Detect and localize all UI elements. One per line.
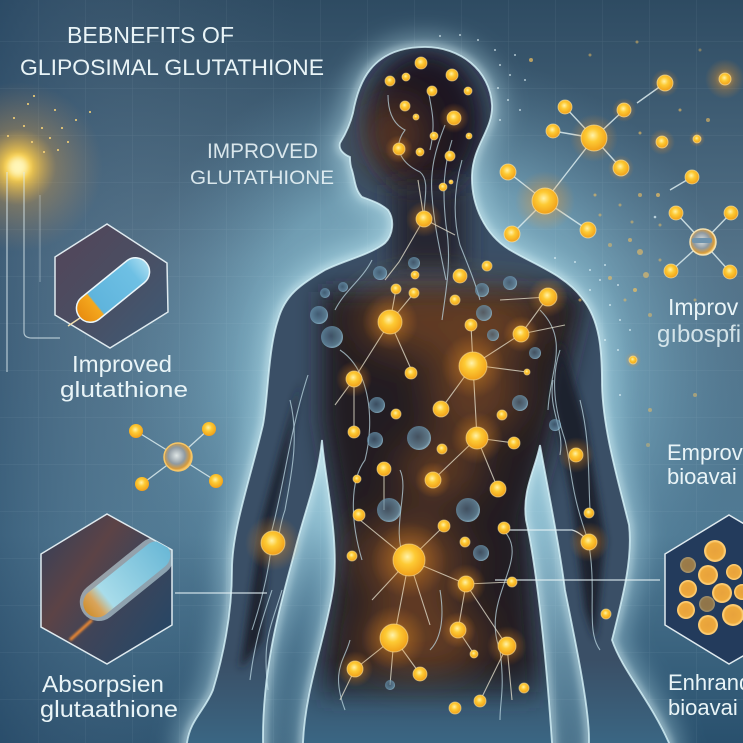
dark interior: torso xyxy=(320,292,585,700)
connector lines: callouts xyxy=(175,530,660,593)
dark interior: left arm xyxy=(240,380,300,670)
body halo xyxy=(187,47,669,743)
floating molecule network: upper xyxy=(500,59,743,368)
blue cells xyxy=(310,257,561,690)
dark interior: head xyxy=(367,50,483,194)
label: improved glutathione top: GLUTATHIONE xyxy=(190,168,334,189)
particle field: white dust xyxy=(439,34,656,396)
label: improved glutathione left xyxy=(60,351,188,402)
body nodes xyxy=(261,57,611,714)
label: improved bioavailability xyxy=(667,440,743,489)
label: improved right xyxy=(657,294,741,348)
title: BEBNEFITS OF xyxy=(67,22,234,48)
capsule xyxy=(71,252,155,328)
label: improved glutathione left: glutathione xyxy=(60,377,188,402)
label: absorption glutathione: Absorpsien xyxy=(42,671,164,697)
particle field: right xyxy=(529,40,710,447)
label: enhanced bioavailability xyxy=(668,670,743,720)
title xyxy=(20,22,324,80)
label: enhanced bioavailability: bioavai xyxy=(668,695,738,720)
bottom fog xyxy=(188,668,668,743)
title: GLIPOSIMAL GLUTATHIONE xyxy=(20,55,324,80)
label: improved bioavailability: bioavai xyxy=(667,464,737,489)
dark interior: right arm xyxy=(552,340,605,640)
light burst xyxy=(0,82,103,252)
label: improved right: gıbospfi xyxy=(657,321,741,348)
label: improved bioavailability: Emprov xyxy=(667,440,743,465)
orange haze: torso xyxy=(355,101,545,678)
dark interior: neck xyxy=(392,185,466,270)
label: improved glutathione top xyxy=(190,140,334,189)
torso network connectors xyxy=(335,180,565,701)
body node halos xyxy=(245,103,609,687)
label: improved glutathione left: Improved xyxy=(72,351,172,377)
label: improved glutathione top: IMPROVED xyxy=(207,140,318,163)
hexagon: capsule lower left xyxy=(41,514,181,664)
floating molecule: left xyxy=(129,422,223,491)
hexagon: liposomes right xyxy=(665,515,743,664)
hexagon: capsule upper left xyxy=(55,224,168,348)
connector lines: upper left xyxy=(7,172,60,372)
label: absorption glutathione xyxy=(40,671,178,722)
capsule xyxy=(80,538,172,621)
human body silhouette xyxy=(160,47,680,743)
nerve lines xyxy=(250,90,600,720)
floating molecule: right xyxy=(664,170,738,279)
label: improved right: Improv xyxy=(668,294,739,320)
label: absorption glutathione: glutaathione xyxy=(40,696,178,722)
